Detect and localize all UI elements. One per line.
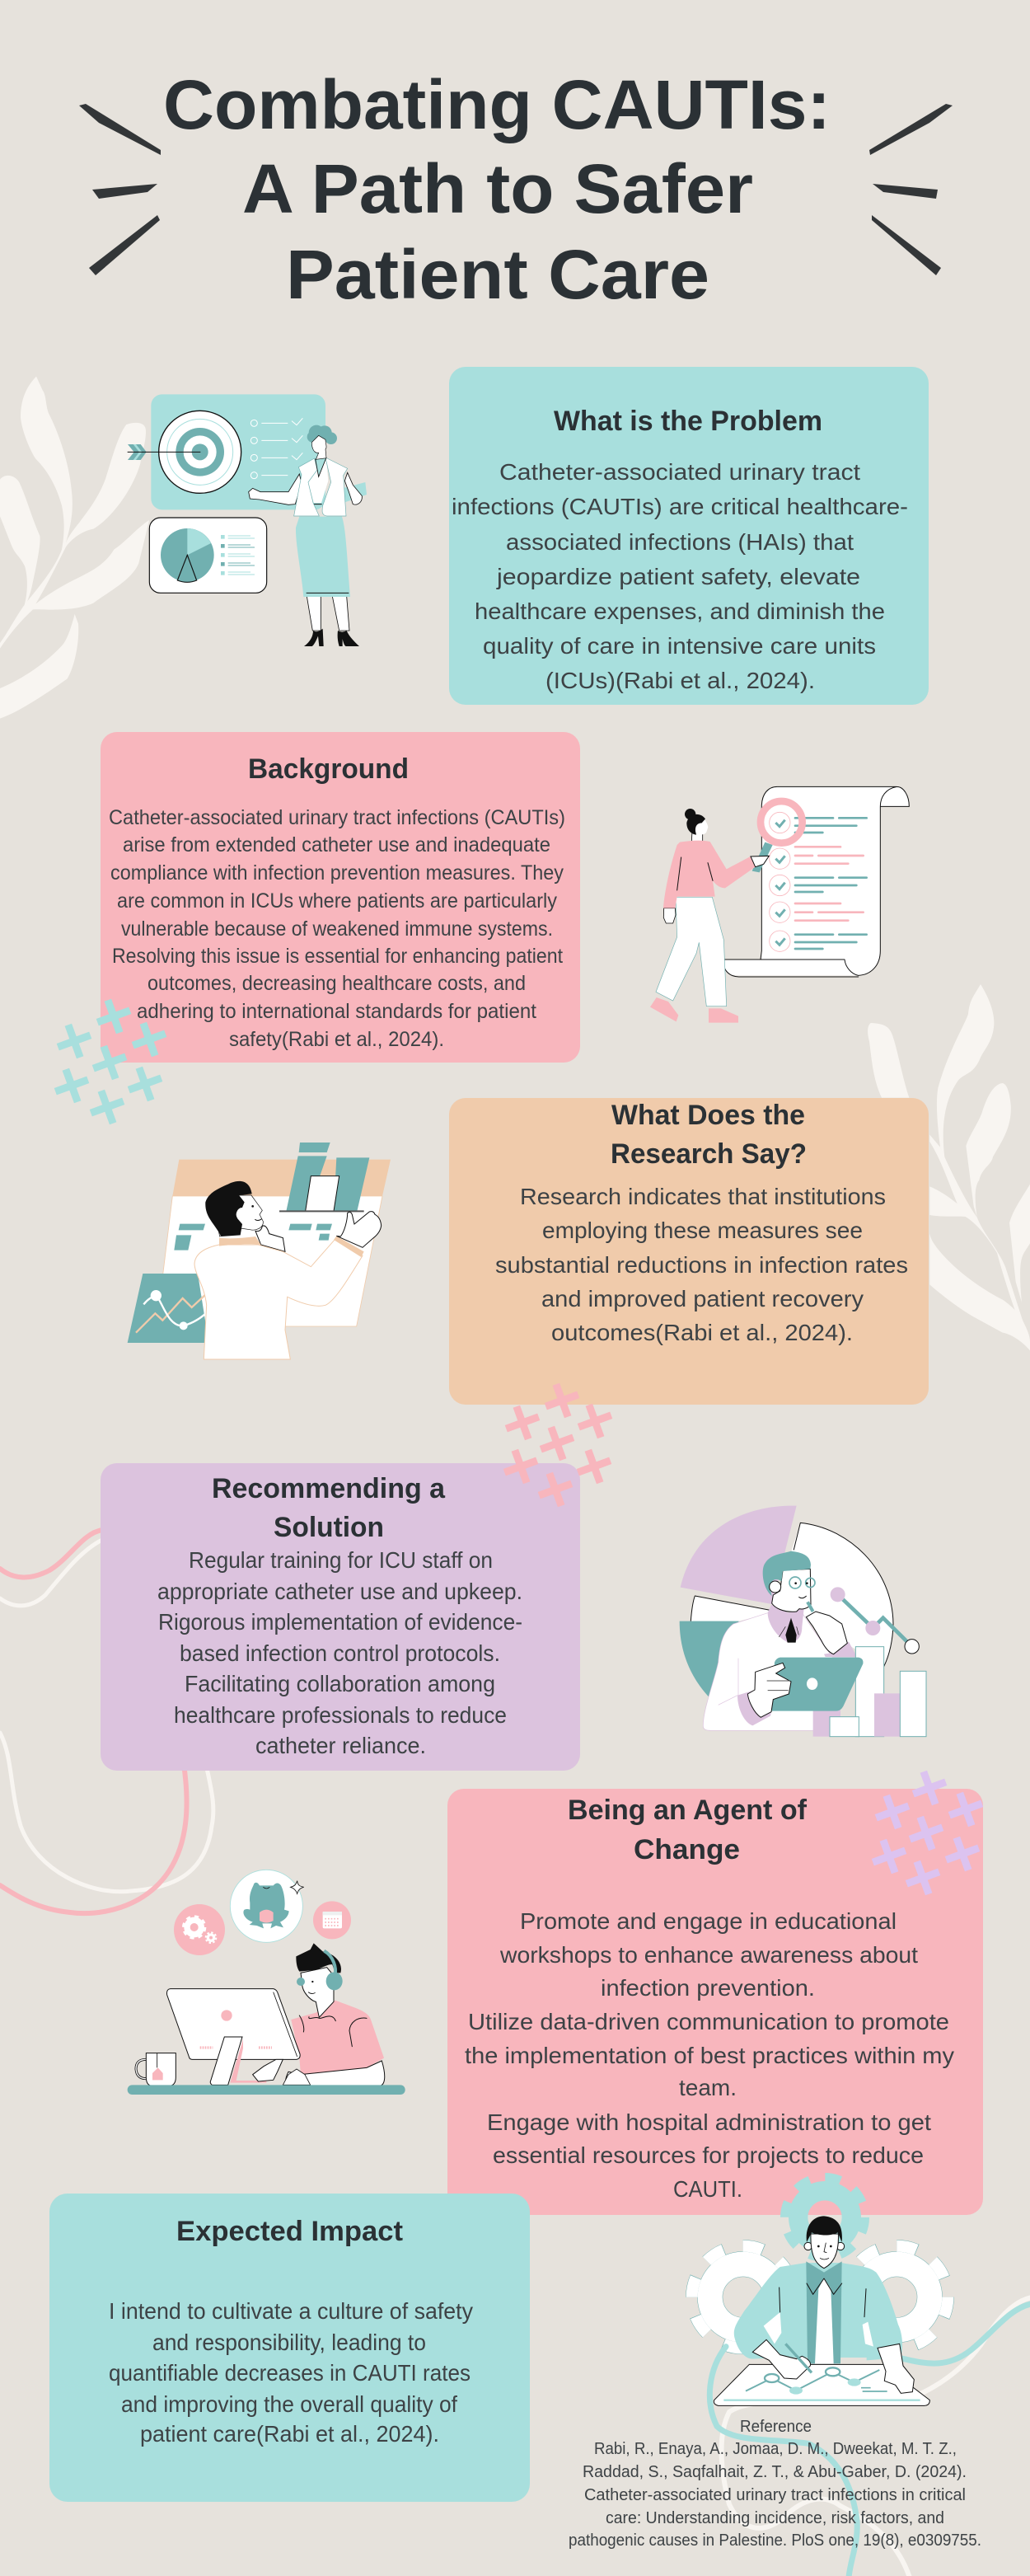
body text: Catheter-associated urinary tract <box>499 459 860 485</box>
body text: CAUTI. <box>673 2176 742 2202</box>
heading: What is the Problem <box>554 406 822 437</box>
body text: based infection control protocols. <box>180 1640 500 1666</box>
heading: What Does the <box>611 1100 805 1131</box>
body text <box>465 1908 954 2202</box>
body text: substantial reductions in infection rates <box>495 1252 908 1278</box>
background curve: bottom right white <box>722 2297 1030 2576</box>
body text: Catheter-associated urinary tract infections (CAUTIs) <box>109 806 565 829</box>
title strokes: right <box>869 104 953 275</box>
body text: Facilitating collaboration among <box>185 1671 495 1696</box>
teal target panel <box>151 394 325 509</box>
woman <box>650 809 769 1023</box>
body text: healthcare professionals to reduce <box>174 1702 507 1728</box>
reference text: care: Understanding incidence, risk factors, and <box>606 2509 944 2527</box>
body text: quality of care in intensive care units <box>483 633 876 659</box>
hands <box>752 2339 914 2393</box>
decoration: teal crosses <box>49 994 171 1129</box>
tablet <box>714 2364 929 2405</box>
body text: healthcare expenses, and diminish the <box>475 598 885 624</box>
background leaf: right <box>868 984 1030 1350</box>
mug <box>136 2053 176 2086</box>
reference text: pathogenic causes in Palestine. PloS one, 19(8), e0309755. <box>569 2531 981 2550</box>
illustration: man analysing charts <box>128 1143 391 1359</box>
decoration: pink crosses <box>499 1378 617 1512</box>
heading: Background <box>248 753 409 785</box>
body text: compliance with infection prevention measures. They <box>110 861 564 884</box>
decoration: purple crosses <box>867 1766 988 1900</box>
scroll <box>724 786 909 977</box>
calendar bubble <box>313 1901 351 1939</box>
background curves: left middle <box>0 1530 213 1913</box>
list lines <box>795 818 867 949</box>
line chart <box>831 1587 919 1654</box>
teal curve <box>709 2304 1030 2576</box>
body text: jeopardize patient safety, elevate <box>496 564 860 589</box>
man <box>194 1181 382 1359</box>
heading: Being an Agent of <box>568 1795 808 1826</box>
panel: background <box>101 732 580 1063</box>
body text: Promote and engage in educational <box>520 1908 897 1934</box>
body text: safety(Rabi et al., 2024). <box>229 1028 444 1051</box>
man <box>703 1551 859 1730</box>
body text <box>452 459 908 693</box>
computer <box>166 1989 311 2085</box>
white gears <box>692 2246 948 2348</box>
body text: workshops to enhance awareness about <box>499 1942 918 1968</box>
body text: I intend to cultivate a culture of safety <box>109 2298 473 2324</box>
body text: Resolving this issue is essential for enhancing patient <box>112 945 563 968</box>
checklist <box>250 418 302 479</box>
body text: arise from extended catheter use and inadequate <box>123 833 550 856</box>
body text: Utilize data-driven communication to promote <box>468 2009 949 2034</box>
body text: outcomes(Rabi et al., 2024). <box>551 1320 853 1345</box>
heading: Recommending a <box>212 1473 446 1504</box>
heading <box>212 1473 446 1543</box>
body text: the implementation of best practices within my <box>465 2043 954 2068</box>
body text: essential resources for projects to reduce <box>493 2142 924 2168</box>
pie segments <box>680 1506 893 1696</box>
target <box>128 411 241 493</box>
check circles <box>770 812 790 951</box>
background leaf: left <box>0 377 149 719</box>
reference text: Rabi, R., Enaya, A., Jomaa, D. M., Dweekat, M. T. Z., <box>594 2440 957 2458</box>
bar chart on sheet <box>174 1143 369 1250</box>
heading: Solution <box>274 1512 384 1543</box>
illustration: man at desktop computer <box>128 1870 405 2095</box>
laptop <box>737 1658 863 1725</box>
body text: Research indicates that institutions <box>520 1184 886 1209</box>
body text: adhering to international standards for patient <box>137 1000 536 1023</box>
body text <box>109 2298 473 2447</box>
reference text <box>569 2418 981 2550</box>
bar chart <box>813 1647 926 1737</box>
pie chart card <box>149 518 267 593</box>
body text: employing these measures see <box>542 1218 863 1243</box>
body text: and responsibility, leading to <box>152 2330 426 2355</box>
body text: (ICUs)(Rabi et al., 2024). <box>545 668 815 693</box>
chart sheet <box>157 1160 391 1326</box>
body text <box>157 1547 522 1758</box>
man <box>734 2216 902 2363</box>
panel: recommending a solution <box>101 1463 580 1771</box>
gear bubble <box>174 1904 225 1955</box>
panel: expected impact <box>49 2194 530 2502</box>
body text: infection prevention. <box>601 1975 815 2001</box>
heading: Expected Impact <box>176 2216 403 2247</box>
panel: what does the research say <box>449 1098 929 1405</box>
woman <box>249 425 367 646</box>
body text: catheter reliance. <box>255 1733 426 1758</box>
title strokes: left <box>79 104 161 275</box>
body text: patient care(Rabi et al., 2024). <box>140 2421 439 2447</box>
body text: vulnerable because of weakened immune systems. <box>121 917 553 941</box>
teal gear <box>785 2178 864 2257</box>
body text: outcomes, decreasing healthcare costs, and <box>147 972 526 995</box>
body text: Rigorous implementation of evidence- <box>158 1609 522 1635</box>
panel: being an agent of change <box>447 1789 983 2215</box>
reference text: Raddad, S., Saqfalhait, Z. T., & Abu-Gaber, D. (2024). <box>583 2463 967 2481</box>
body text: team. <box>679 2075 737 2100</box>
heading: Change <box>634 1834 740 1865</box>
title: Combating CAUTIs: <box>163 66 831 143</box>
body text: Regular training for ICU staff on <box>189 1547 493 1573</box>
heading: Research Say? <box>611 1138 807 1170</box>
illustration: woman with checklist scroll <box>650 786 909 1023</box>
illustration: woman presenting target <box>128 394 367 646</box>
desk <box>128 2085 405 2095</box>
body text: quantifiable decreases in CAUTI rates <box>109 2360 471 2386</box>
body text: infections (CAUTIs) are critical healthcare- <box>452 494 908 519</box>
body text <box>495 1184 908 1345</box>
reference text: Reference <box>740 2418 812 2436</box>
illustration: man with laptop and charts <box>680 1506 926 1737</box>
body text: Engage with hospital administration to get <box>487 2109 931 2135</box>
frog bubble <box>230 1870 304 1942</box>
body text: and improving the overall quality of <box>121 2391 457 2417</box>
body text <box>109 806 565 1051</box>
panel: what is the problem <box>449 367 929 705</box>
illustration: man with gears and tablet <box>692 2178 1030 2576</box>
title: A Path to Safer <box>242 150 753 228</box>
title: Patient Care <box>286 236 709 313</box>
person <box>286 1943 385 2086</box>
heading <box>568 1795 808 1865</box>
body text: appropriate catheter use and upkeep. <box>157 1579 522 1604</box>
line chart card <box>128 1274 208 1343</box>
heading <box>611 1100 807 1170</box>
body text: associated infections (HAIs) that <box>506 529 854 555</box>
body text: are common in ICUs where patients are particularly <box>117 889 557 913</box>
body text: and improved patient recovery <box>541 1286 864 1311</box>
title <box>163 66 831 313</box>
reference text: Catheter-associated urinary tract infections in critical <box>584 2486 966 2504</box>
magnifying glass <box>752 801 803 872</box>
